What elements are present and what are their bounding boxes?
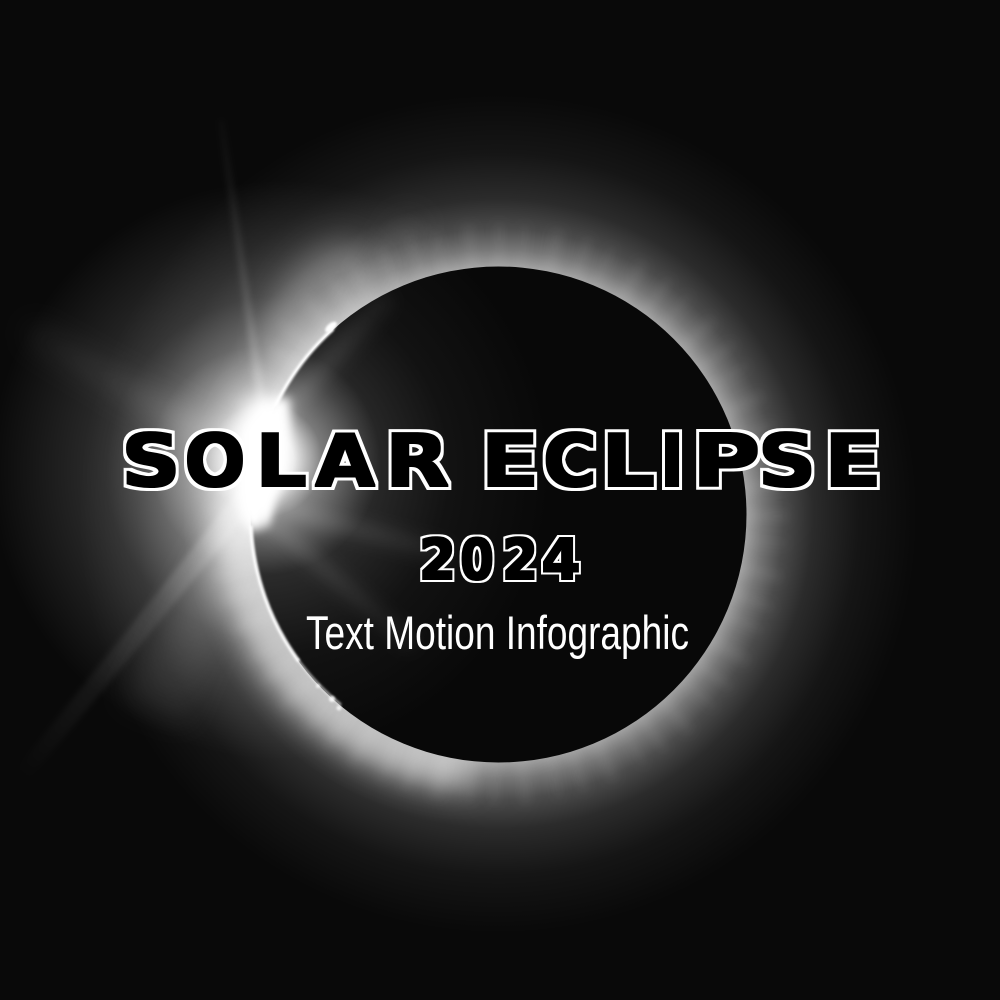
corona glow — [0, 94, 918, 934]
title: SOLAR ECLIPSE: C — [543, 420, 597, 504]
year: 2024 — [419, 527, 580, 593]
sun rays from diamond flare — [0, 120, 430, 800]
solar eclipse infographic — [16, 134, 880, 894]
year: 2024: 0 — [460, 529, 494, 593]
title: SOLAR ECLIPSE — [121, 419, 882, 504]
title: SOLAR ECLIPSE: O — [184, 419, 246, 503]
diamond ring flare — [150, 345, 380, 575]
title: SOLAR ECLIPSE: A — [315, 419, 375, 503]
rays across disc — [268, 300, 437, 642]
title: SOLAR ECLIPSE: I — [660, 421, 684, 504]
title: SOLAR ECLIPSE: S — [121, 420, 181, 504]
title: SOLAR ECLIPSE: R — [385, 420, 449, 504]
year: 2024: 4 — [542, 528, 580, 593]
title: SOLAR ECLIPSE: E — [480, 419, 540, 503]
title: SOLAR ECLIPSE: E — [824, 419, 882, 503]
year: 2024: 2 — [419, 527, 456, 592]
title: SOLAR ECLIPSE: L — [601, 419, 655, 503]
bright chromosphere rim — [251, 330, 340, 704]
title: SOLAR ECLIPSE: P — [691, 419, 761, 503]
title: SOLAR ECLIPSE: L — [255, 420, 307, 504]
subtitle: Text Motion Infographic — [306, 606, 689, 659]
title: SOLAR ECLIPSE: S — [758, 420, 816, 504]
prominences on the limb — [316, 320, 342, 710]
year: 2024: 2 — [502, 527, 538, 593]
moon disc — [250, 266, 746, 762]
